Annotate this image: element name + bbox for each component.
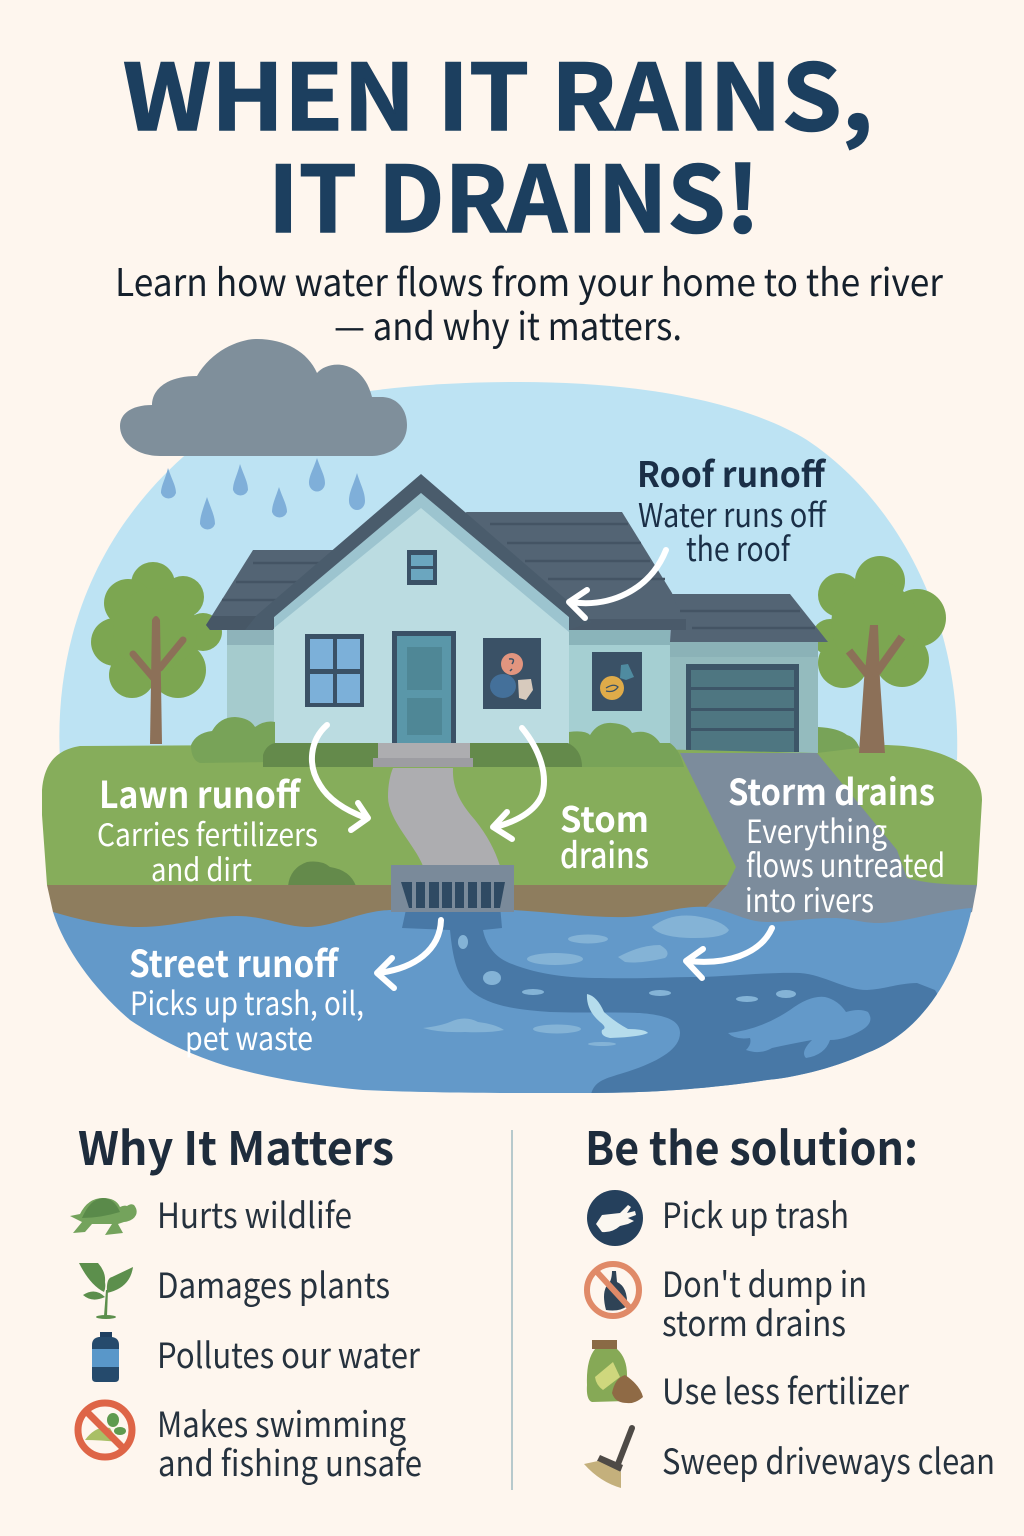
panel: house and watershed scene: [42, 339, 1000, 1100]
label: roof runoff: Roof runoff: [637, 447, 827, 498]
tree right: [812, 556, 946, 753]
rain drops: [161, 458, 365, 530]
panel: why it matters: Hurts wildlife: [157, 1188, 352, 1239]
garage roof: [670, 594, 828, 642]
dark river channel: [402, 912, 938, 1093]
main house body: [274, 497, 569, 743]
label: storm drains right: [728, 764, 945, 922]
title: [123, 25, 873, 259]
label: storm drains right: Storm drains: [728, 764, 935, 816]
subtitle: Learn how water flows from your home to the river: [115, 252, 943, 307]
right tree trunk base: [859, 730, 885, 753]
title: IT DRAINS!: [268, 127, 760, 259]
panel: why it matters: Pollutes our water: [157, 1328, 420, 1379]
icon: turtle: [70, 1198, 137, 1235]
front door: [392, 631, 456, 743]
label: storm drains right: flows untreated: [746, 841, 945, 887]
label: lawn runoff: Lawn runoff: [99, 765, 301, 819]
label: street runoff: Street runoff: [129, 934, 339, 988]
arrow: storm drains center: [493, 728, 544, 839]
driveway: [680, 753, 977, 940]
label: street runoff: [129, 934, 364, 1060]
label: storm drains right: Everything: [746, 807, 887, 853]
turtle silhouette in river: [728, 997, 870, 1058]
side wing left: [227, 630, 275, 743]
arrow: into river: [686, 928, 772, 978]
middle wing: [569, 630, 670, 743]
small shrub on lawn: [288, 862, 356, 886]
panel: be the solution: Use less fertilizer: [662, 1364, 909, 1415]
text: swimming unsafe: Makes swimming: [157, 1397, 406, 1448]
tree left: [91, 562, 222, 744]
icon: fertilizer bag: [587, 1340, 643, 1403]
subtitle: [115, 252, 943, 351]
attic window: [407, 550, 437, 585]
label: street runoff: pet waste: [185, 1014, 313, 1060]
walkway: [388, 768, 500, 866]
icon: broom: [584, 1428, 632, 1488]
left roof: [206, 550, 340, 630]
main gable roof: [245, 474, 592, 630]
water: [53, 907, 972, 1093]
panel: why it matters: [70, 1113, 422, 1487]
dirt bank: [47, 885, 730, 940]
label: lawn runoff: [97, 765, 318, 890]
rain cloud: [120, 339, 407, 456]
sky: [59, 382, 957, 760]
text: do not dump: [662, 1257, 867, 1347]
label: storm drains center: [560, 792, 649, 879]
arrow: roof runoff: [569, 550, 666, 618]
gable trim: [274, 493, 569, 632]
text: swimming unsafe: and fishing unsafe: [158, 1436, 422, 1487]
icon: bottle: [92, 1332, 119, 1382]
bushes behind house: [818, 727, 862, 756]
icon: do not dump: [587, 1264, 639, 1316]
icon: hand picking up trash: [587, 1190, 643, 1246]
heading: why it matters: Why It Matters: [78, 1113, 394, 1179]
window with debris: [483, 638, 541, 709]
label: roof runoff: [637, 447, 828, 571]
back roof: [440, 512, 686, 630]
arrow: lawn runoff: [312, 725, 368, 830]
window left: [305, 634, 364, 707]
storm drain grate: [391, 865, 514, 912]
panel: why it matters: Damages plants: [157, 1258, 390, 1309]
text: swimming unsafe: [157, 1397, 422, 1487]
light water patches: [423, 915, 796, 1046]
label: lawn runoff: Carries fertilizers: [97, 810, 318, 855]
label: roof runoff: the roof: [686, 523, 791, 571]
heading: be the solution: Be the solution:: [585, 1113, 918, 1179]
lawn: [42, 744, 982, 885]
hedge strip: [263, 743, 582, 767]
text: do not dump: storm drains: [662, 1296, 846, 1347]
label: storm drains center: drains: [560, 828, 649, 879]
subtitle: — and why it matters.: [334, 296, 682, 351]
label: street runoff: Picks up trash, oil,: [130, 979, 364, 1025]
label: lawn runoff: and dirt: [151, 845, 252, 890]
panel: be the solution: Pick up trash: [662, 1188, 849, 1239]
label: storm drains center: Stom: [560, 792, 649, 843]
text: do not dump: Don't dump in: [662, 1257, 867, 1308]
icon: no swimming or fishing: [78, 1403, 132, 1457]
icon: plant sprout: [79, 1263, 133, 1319]
arrow: street runoff: [377, 920, 441, 988]
panel: be the solution: [584, 1113, 995, 1488]
right bush: [569, 723, 684, 767]
garage wing: [670, 642, 818, 754]
label: roof runoff: Water runs off: [638, 489, 828, 537]
label: storm drains right: into rivers: [745, 876, 874, 922]
front steps: [373, 743, 473, 767]
left bush: [191, 717, 275, 763]
fin in water: [587, 994, 648, 1038]
title: WHEN IT RAINS,: [123, 25, 873, 157]
